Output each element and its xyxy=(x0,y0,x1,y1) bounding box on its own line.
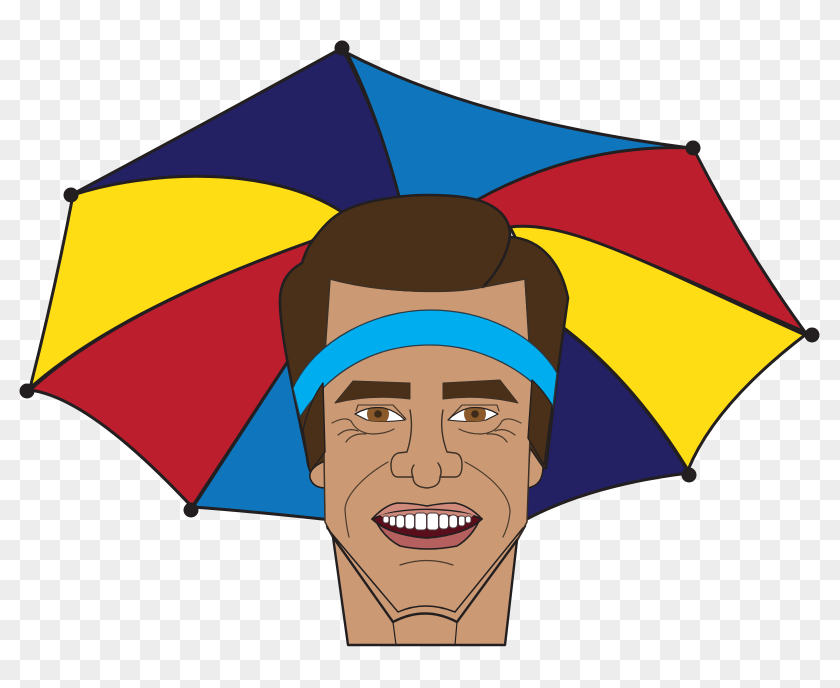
left sideburn xyxy=(303,383,325,472)
tip: upper right xyxy=(686,140,700,156)
panel: navy top-left xyxy=(71,48,402,240)
panel: blue lower left xyxy=(193,358,340,521)
right sideburn xyxy=(528,380,552,465)
tip: lower right xyxy=(682,468,696,482)
front hair quiff xyxy=(302,195,510,292)
wrinkles and face lines xyxy=(332,419,521,565)
tip: left xyxy=(20,384,34,398)
hair: forehead line xyxy=(325,279,529,345)
eye: left xyxy=(354,404,407,422)
tip: right xyxy=(804,328,820,342)
umbrella canopy xyxy=(30,48,805,521)
tip: lower left xyxy=(184,502,198,518)
jaw lines xyxy=(327,528,523,645)
panel: yellow right xyxy=(510,226,805,470)
upper lip xyxy=(372,503,482,519)
eye: right xyxy=(448,404,500,422)
tip: upper left xyxy=(64,188,78,202)
teeth xyxy=(383,513,471,530)
panel: blue top xyxy=(347,53,690,205)
ear: right xyxy=(527,448,543,488)
face xyxy=(323,279,532,622)
panel: navy lower right xyxy=(510,326,689,520)
eyebrow: left xyxy=(335,381,410,403)
mouth interior xyxy=(372,510,482,538)
lower lip xyxy=(375,519,480,549)
hair: back and sides xyxy=(280,230,568,480)
mouth xyxy=(372,503,482,549)
neck xyxy=(327,526,525,645)
nose xyxy=(391,410,462,488)
umbrella tip dots xyxy=(20,40,820,518)
ear: left xyxy=(310,461,326,488)
tip: top xyxy=(334,40,350,56)
panel: red left xyxy=(30,241,320,507)
eyebrow: right xyxy=(443,380,518,403)
gums xyxy=(380,510,474,518)
head xyxy=(280,195,568,645)
panel: yellow upper left xyxy=(30,176,342,388)
panel: red upper right xyxy=(477,148,805,332)
headband xyxy=(293,310,557,417)
